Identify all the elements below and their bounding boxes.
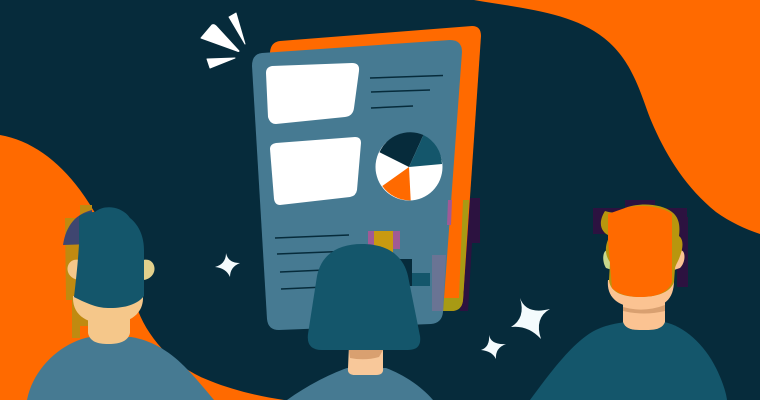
hair bbox=[308, 244, 420, 350]
person: man on right bbox=[530, 205, 727, 400]
icon: burst marks bbox=[201, 13, 245, 68]
text lines: bottom left bbox=[275, 235, 349, 289]
card: upper white block bbox=[266, 63, 359, 124]
hair fringe bbox=[63, 210, 92, 245]
neck bbox=[623, 300, 665, 330]
document: blue front sheet bbox=[252, 40, 462, 330]
small bar chart blocks bbox=[368, 231, 430, 286]
artefact: plum halo by right man bbox=[593, 200, 688, 287]
ears bbox=[68, 260, 80, 280]
text lines: top right bbox=[370, 76, 443, 108]
person: man on left bbox=[27, 207, 214, 400]
ears bbox=[603, 250, 612, 270]
neck bbox=[88, 315, 130, 344]
artefact: olive edge on orange sheet bbox=[443, 200, 469, 311]
hair bbox=[74, 207, 144, 308]
document: orange back sheet bbox=[270, 26, 481, 311]
neck bbox=[348, 345, 383, 375]
person: woman in centre bbox=[287, 244, 433, 400]
pie chart bbox=[376, 132, 442, 200]
icon: sparkle small bbox=[481, 335, 506, 359]
hair outer bbox=[601, 205, 682, 297]
icon: sparkle large bbox=[511, 298, 550, 339]
card: lower white block bbox=[270, 137, 361, 205]
blob: top right orange bbox=[474, 0, 760, 234]
icon: sparkle left bbox=[215, 253, 240, 277]
blob: left orange bbox=[0, 135, 284, 400]
artefact: muted strip on sheet edge bbox=[432, 255, 446, 311]
body bbox=[530, 322, 727, 400]
hair inner bbox=[608, 206, 672, 297]
body bbox=[27, 337, 214, 400]
artefact: mustard halo by left man bbox=[65, 205, 92, 338]
face bbox=[73, 296, 143, 324]
face bbox=[608, 280, 674, 308]
artefact: plum shading beside sheet bbox=[460, 198, 480, 311]
body bbox=[287, 368, 433, 400]
